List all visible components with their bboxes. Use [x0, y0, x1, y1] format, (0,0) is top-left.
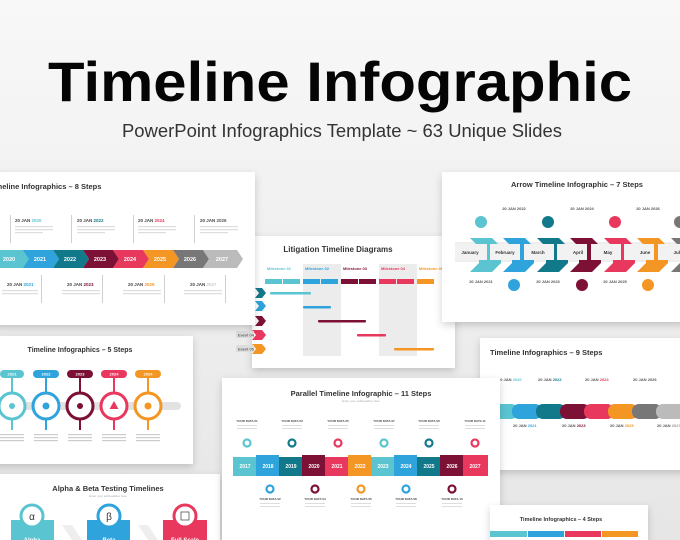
panel: parallel timeline 11 steps: 2019 — [285, 464, 297, 470]
panel: litigation timeline diagrams: Milestone 05 — [419, 266, 444, 271]
panel: parallel timeline 11 steps — [222, 378, 500, 540]
panel: timeline 4 steps — [490, 505, 648, 540]
panel: parallel timeline 11 steps: 2020 — [308, 464, 320, 470]
panel: arrow timeline 7 steps: January — [461, 250, 479, 255]
panel: timeline 5 steps: 2024 — [110, 372, 119, 376]
panel: timeline 5 steps: 2021 — [8, 372, 17, 376]
panel: parallel timeline 11 steps: YOUR DATA 07 — [373, 419, 395, 423]
panel: arrow timeline 7 steps: 20 JAN 2025 — [603, 279, 628, 284]
panel: timeline 8 steps: 2023 — [94, 257, 106, 263]
panel: timeline 8 steps: 2021 — [34, 257, 46, 263]
panel: parallel timeline 11 steps: YOUR DATA 06 — [350, 497, 372, 501]
panel: timeline 9 steps: 20 JAN 2026 — [633, 377, 657, 382]
panel: timeline 8 steps: 2022 — [64, 257, 76, 263]
panel: arrow timeline 7 steps: 20 JAN 2023 — [536, 279, 561, 284]
panel: timeline 8 steps — [0, 172, 255, 325]
panel: parallel timeline 11 steps: 2017 — [239, 464, 251, 470]
panel: parallel timeline 11 steps: YOUR DATA 10 — [441, 497, 463, 501]
panel: parallel timeline 11 steps: 2023 — [377, 464, 389, 470]
panel: timeline 5 steps: 2024 — [144, 372, 153, 376]
panel: timeline 8 steps: 20 JAN 2020 — [15, 218, 42, 223]
panel: timeline 8 steps: 2024 — [124, 257, 137, 263]
panel: timeline 8 steps: 2025 — [154, 257, 166, 263]
panel: alpha beta testing: α — [29, 512, 35, 523]
panel: arrow timeline 7 steps: May — [604, 250, 613, 255]
panel: parallel timeline 11 steps: YOUR DATA 08 — [395, 497, 417, 501]
panel: arrow timeline 7 steps: 20 JAN 2026 — [636, 206, 661, 211]
panel: alpha beta testing — [0, 474, 220, 540]
panel: litigation timeline diagrams: Milestone 03 — [343, 266, 368, 271]
panel: timeline 9 steps — [480, 338, 680, 470]
panel: litigation timeline diagrams: Milestone 01 — [267, 266, 292, 271]
panel: timeline 8 steps: 20 JAN 2025 — [128, 282, 155, 287]
panel: litigation timeline diagrams: Event 05 — [238, 346, 255, 352]
panel: timeline 5 steps: 2023 — [76, 372, 85, 376]
panel: timeline 9 steps: 20 JAN 2023 — [562, 423, 586, 428]
panel: parallel timeline 11 steps: 2018 — [262, 464, 274, 470]
panel: arrow timeline 7 steps: June — [640, 250, 651, 255]
panel: parallel timeline 11 steps: YOUR DATA 11 — [464, 419, 486, 423]
panel: arrow timeline 7 steps: February — [495, 250, 515, 255]
panel: timeline 5 steps: Timeline Infographics – 5 Steps — [28, 347, 133, 354]
panel: arrow timeline 7 steps: 20 JAN 2024 — [570, 206, 595, 211]
panel: arrow timeline 7 steps: April — [573, 250, 583, 255]
panel: parallel timeline 11 steps: YOUR DATA 09 — [418, 419, 440, 423]
panel: parallel timeline 11 steps: YOUR DATA 01 — [236, 419, 258, 423]
panel: timeline 9 steps: 20 JAN 2027 — [657, 423, 680, 428]
panel: litigation timeline diagrams: Milestone 04 — [381, 266, 406, 271]
panel: timeline 8 steps: 20 JAN 2024 — [138, 218, 165, 223]
panel: timeline 9 steps: 20 JAN 2020 — [498, 377, 522, 382]
panel: parallel timeline 11 steps: 2024 — [400, 464, 412, 470]
panel: parallel timeline 11 steps: 2022 — [354, 464, 366, 470]
panel: parallel timeline 11 steps: 2021 — [331, 464, 343, 470]
panel: parallel timeline 11 steps: 2025 — [423, 464, 435, 470]
panel: timeline 9 steps: 20 JAN 2024 — [585, 377, 609, 382]
panel: alpha beta testing: Alpha & Beta Testing Timelines — [52, 484, 164, 493]
panel: arrow timeline 7 steps: 20 JAN 2022 — [502, 206, 527, 211]
panel: timeline 9 steps: 20 JAN 2025 — [610, 423, 634, 428]
title: Timeline Infographic — [48, 50, 632, 113]
panel: timeline 9 steps: Timeline Infographics – 9 Steps — [490, 348, 602, 357]
panel: parallel timeline 11 steps: YOUR DATA 04 — [304, 497, 326, 501]
panel: timeline 5 steps: 2022 — [42, 372, 51, 376]
panel: litigation timeline diagrams: Milestone 02 — [305, 266, 330, 271]
panel: timeline 9 steps: 20 JAN 2021 — [513, 423, 537, 428]
panel: timeline 8 steps: 20 JAN 2026 — [200, 218, 227, 223]
panel: timeline 8 steps: 2020 — [3, 257, 15, 263]
panel: litigation timeline diagrams — [236, 236, 455, 368]
panel: litigation timeline diagrams: Event 04 — [238, 332, 255, 338]
panel: parallel timeline 11 steps: 2026 — [446, 464, 458, 470]
panel: parallel timeline 11 steps: YOUR DATA 05 — [327, 419, 349, 423]
panel: timeline 8 steps: 2027 — [216, 257, 228, 263]
panel: timeline 4 steps: Timeline Infographics – 4 Steps — [520, 517, 602, 523]
panel: parallel timeline 11 steps: Parallel Timeline Infographic – 11 Steps — [291, 389, 431, 398]
panel: timeline 8 steps: 2026 — [184, 257, 196, 263]
panel: timeline 5 steps — [0, 336, 193, 464]
panel: arrow timeline 7 steps: Arrow Timeline Infographic – 7 Steps — [511, 180, 643, 189]
panel: alpha beta testing: β — [106, 512, 112, 523]
panel: arrow timeline 7 steps: 20 JAN 2021 — [469, 279, 494, 284]
panel: timeline 9 steps: 20 JAN 2022 — [538, 377, 562, 382]
panel: timeline 8 steps: 20 JAN 2022 — [77, 218, 104, 223]
panel: timeline 8 steps: 20 JAN 2021 — [7, 282, 34, 287]
panel: parallel timeline 11 steps: 2027 — [469, 464, 481, 470]
panel: parallel timeline 11 steps: Enter your subheadline here — [342, 399, 380, 403]
panel: litigation timeline diagrams: Litigation Timeline Diagrams — [283, 245, 393, 254]
panel: arrow timeline 7 steps: March — [531, 250, 545, 255]
panel: arrow timeline 7 steps — [442, 172, 680, 322]
panel: timeline 8 steps: 20 JAN 2023 — [67, 282, 94, 287]
panel: timeline 8 steps: 20 JAN 2027 — [190, 282, 217, 287]
panel: parallel timeline 11 steps: YOUR DATA 03 — [281, 419, 303, 423]
subtitle: PowerPoint Infographics Template ~ 63 Unique Slides — [122, 121, 562, 141]
panel: alpha beta testing: Enter your subheadline here — [89, 494, 127, 498]
panel: parallel timeline 11 steps: YOUR DATA 02 — [259, 497, 281, 501]
